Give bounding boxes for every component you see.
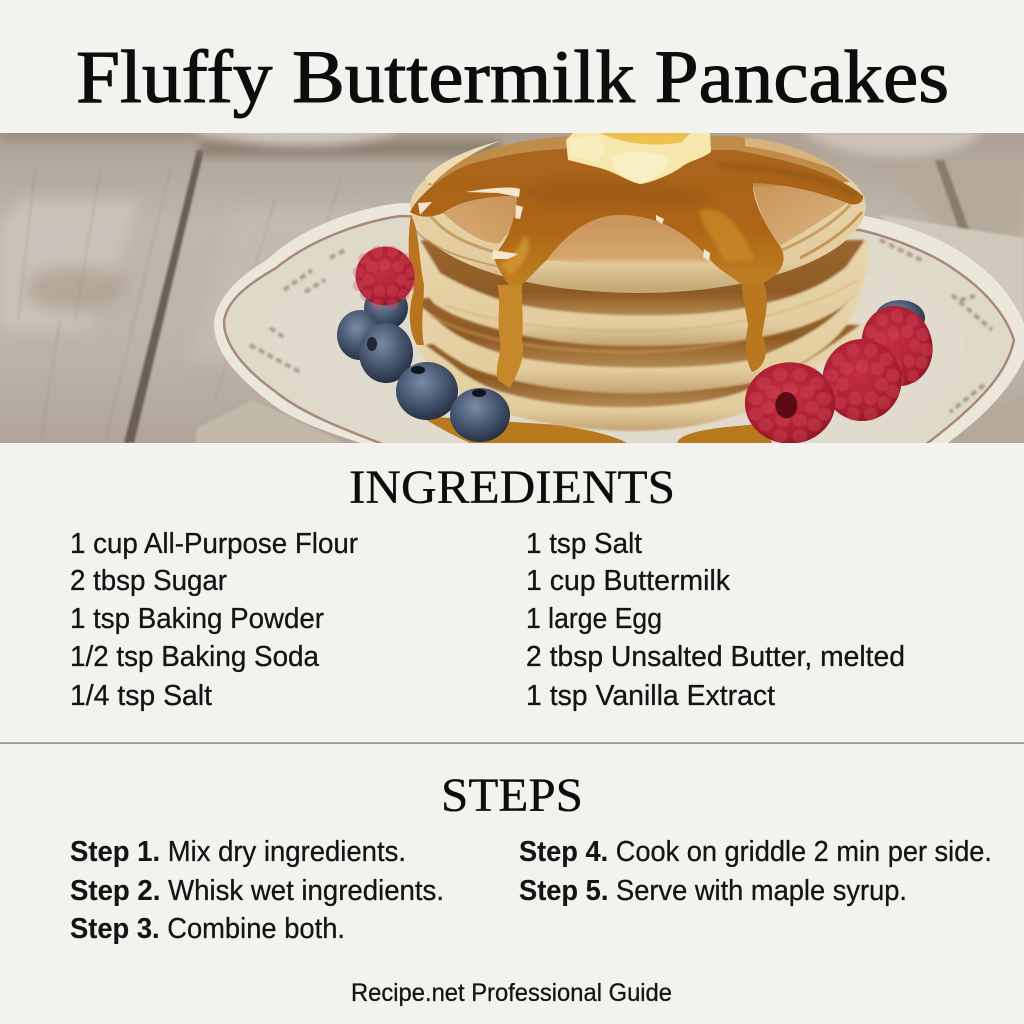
pancake 2	[416, 240, 868, 346]
ingredients list: left column: 2 tbsp Sugar	[70, 565, 227, 597]
steps list: right column: Step 5. Serve with maple syrup.	[519, 875, 907, 907]
ingredients list: left column: 1 cup All-Purpose Flour	[70, 528, 358, 560]
plate	[214, 203, 1024, 445]
butter pat	[566, 133, 711, 184]
ingredients list: right column: 1 tsp Vanilla Extract	[526, 680, 775, 712]
linen napkin	[195, 215, 1024, 443]
hero photo: pancake stack on a plate	[0, 128, 1024, 445]
steps list: left column: Step 3. Combine both.	[70, 913, 345, 945]
pancake 1 top	[410, 135, 866, 293]
footer: Recipe.net Professional Guide	[351, 979, 672, 1007]
steps list: right column	[519, 836, 992, 907]
ingredients list: left column: 1/4 tsp Salt	[70, 680, 212, 712]
syrup puddle	[420, 416, 772, 443]
steps list: left column	[70, 836, 444, 945]
ingredients list: right column: 1 tsp Salt	[526, 528, 642, 560]
steps list: right column: Step 4. Cook on griddle 2 min per side.	[519, 836, 992, 868]
ingredients list: left column: 1/2 tsp Baking Soda	[70, 641, 320, 673]
wooden table	[0, 128, 1024, 443]
ingredients list: right column: 1 cup Buttermilk	[526, 565, 730, 597]
steps heading: STEPS	[441, 769, 583, 822]
steps list: left column: Step 1. Mix dry ingredients.	[70, 836, 406, 868]
browned patches	[425, 136, 850, 265]
steps list: left column: Step 2. Whisk wet ingredients.	[70, 875, 444, 907]
ingredients list: left column: 1 tsp Baking Powder	[70, 603, 324, 635]
raspberries	[353, 246, 942, 444]
ingredients list: left column	[70, 528, 358, 712]
ingredients list: right column: 2 tbsp Unsalted Butter, melted	[526, 641, 905, 673]
pancake 3	[407, 286, 861, 394]
maple syrup glaze	[409, 149, 863, 388]
title: Fluffy Buttermilk Pancakes	[76, 36, 949, 119]
blueberries	[337, 286, 925, 442]
pancake 4 bottom	[417, 310, 863, 431]
ingredients heading: INGREDIENTS	[349, 461, 675, 514]
ingredients list: right column: 1 large Egg	[526, 603, 662, 635]
ingredients list: right column	[526, 528, 905, 712]
